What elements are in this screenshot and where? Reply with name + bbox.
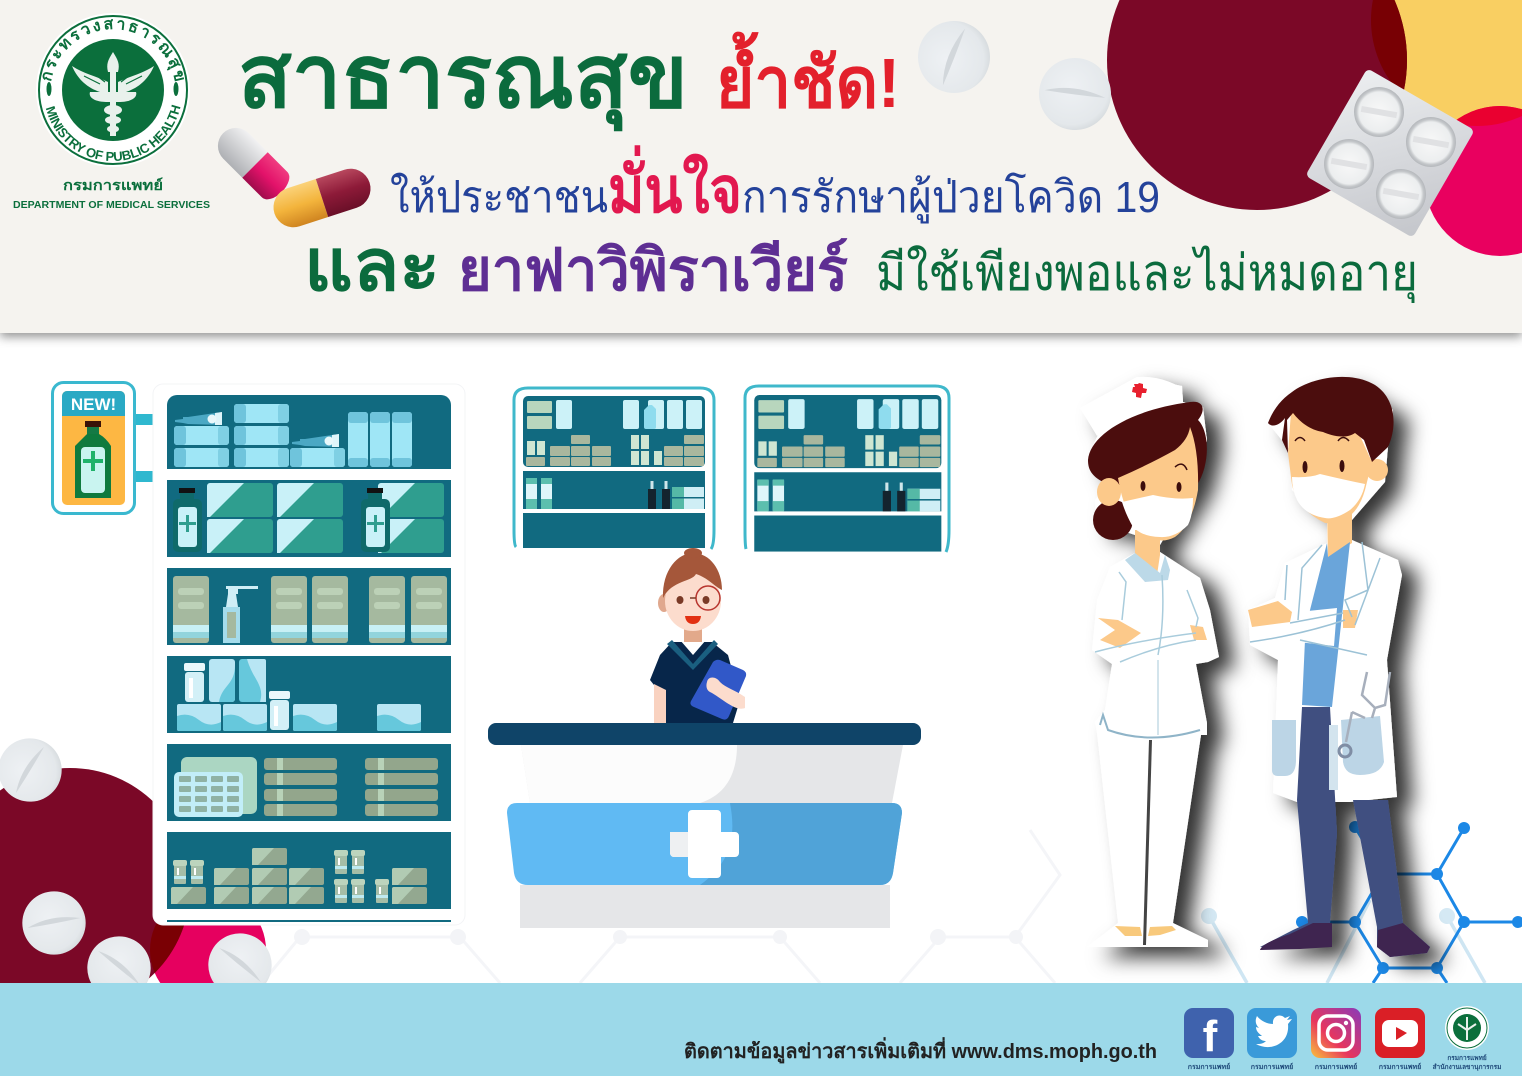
title line 2 [390,145,1160,226]
icon: small ministry logo: สำนักงานเลขานุการกรม [1433,1063,1501,1071]
header band [0,0,1522,333]
main medicine shelf unit [153,384,465,925]
nurse neck and face [1135,530,1160,575]
tablets header [912,15,1113,132]
nurse mask [1122,495,1193,537]
doctor legs [1260,707,1430,957]
blister pack [1305,68,1475,238]
pharmacist clipboard [690,660,746,720]
stethoscope [1339,672,1390,757]
ministry logo: กระทรวงสาธารณสุข [42,19,184,82]
icon: instagram [1311,1008,1361,1071]
wall shelf right [745,386,949,552]
capsule: orange and maroon [268,164,376,232]
pharmacist [650,548,746,723]
title line 3 [304,226,1418,306]
title line 1 [238,27,900,132]
ministry logo: MINISTRY OF PUBLIC HEALTH [46,104,180,161]
title line 1: ย้ำชัด! [716,31,900,122]
connectors: new product box to shelf [134,414,154,482]
pharmacist head [658,594,670,612]
title line 2: มั่นใจ [608,145,742,226]
doctor shoes [1260,923,1332,950]
tablets bottom-left [0,729,283,1011]
doctor pockets [1272,720,1296,776]
nurse arm details [1098,618,1141,648]
icon: youtube [1375,1008,1425,1071]
icon: facebook [1184,1008,1234,1071]
title line 3: ยาฟาวิพิราเวียร์ [458,237,848,303]
icon: small ministry logo [1433,1006,1501,1071]
title line 2: การรักษาผู้ป่วยโควิด 19 [742,172,1160,224]
counter top [488,723,921,745]
counter cross [670,810,739,878]
icon: facebook: กรมการแพทย์ [1188,1062,1230,1071]
doctor scrub [1302,542,1350,707]
bottom-left decorative circles [0,768,266,983]
shelf 5: blister packs and strips [167,744,451,821]
capsule: white and pink [210,120,295,205]
emblem: winged caduceus [72,52,154,136]
wall shelf left [514,388,714,549]
shelf 4: bottles and flat boxes [167,656,451,733]
nurse [1080,377,1219,947]
title line 3: มีใช้เพียงพอและไม่หมดอายุ [876,245,1418,303]
icon: facebook: f [1203,1012,1218,1061]
pale blue molecular network [1201,900,1485,983]
doctor neck and face [1327,510,1352,558]
icon: twitter: กรมการแพทย์ [1251,1062,1293,1071]
title line 2: ให้ประชาชน [390,172,608,222]
faint molecular network [262,830,1060,983]
footer band [0,983,1522,1076]
service counter [488,723,921,928]
nurse shoes [1115,926,1176,936]
doctor hair [1268,377,1394,462]
ministry logo [36,13,190,167]
icon: instagram: กรมการแพทย์ [1315,1062,1357,1071]
department name: DEPARTMENT OF MEDICAL SERVICES [13,199,210,211]
doctor [1248,377,1430,957]
doctor mask [1292,474,1365,518]
department name: กรมการแพทย์ [63,177,163,193]
shelf 6: pots and boxes [167,832,451,909]
shelf 2: bottles and boxes [167,480,451,557]
title line 1: สาธารณสุข [238,27,688,132]
doctor coat silhouette [1248,377,1402,802]
department name [13,177,210,211]
icon: youtube: กรมการแพทย์ [1379,1062,1421,1071]
new product box [52,382,134,514]
blue molecular hexagons [1296,821,1522,983]
doctor arms and lapels [1248,601,1292,627]
shelf 1: ointments and boxes [167,395,451,469]
shelf 3: sprays and boxes [167,568,451,645]
counter blue panel [507,803,902,885]
nurse collar [1125,553,1170,582]
new product box: NEW! [71,395,116,414]
pharmacist body [650,642,740,723]
nurse trouser gap [1143,740,1152,945]
nurse hair [1093,500,1133,540]
icon: small ministry logo: กรมการแพทย์ [1447,1054,1487,1062]
header decorative circles [1107,0,1522,256]
footer follow text: ติดตามข้อมูลข่าวสารเพิ่มเติมที่ www.dms.moph.go.th [684,1036,1157,1065]
title line 3: และ [304,226,440,306]
nurse figure silhouette [1080,377,1219,947]
nurse cap [1080,377,1183,436]
icon: twitter [1247,1008,1297,1071]
